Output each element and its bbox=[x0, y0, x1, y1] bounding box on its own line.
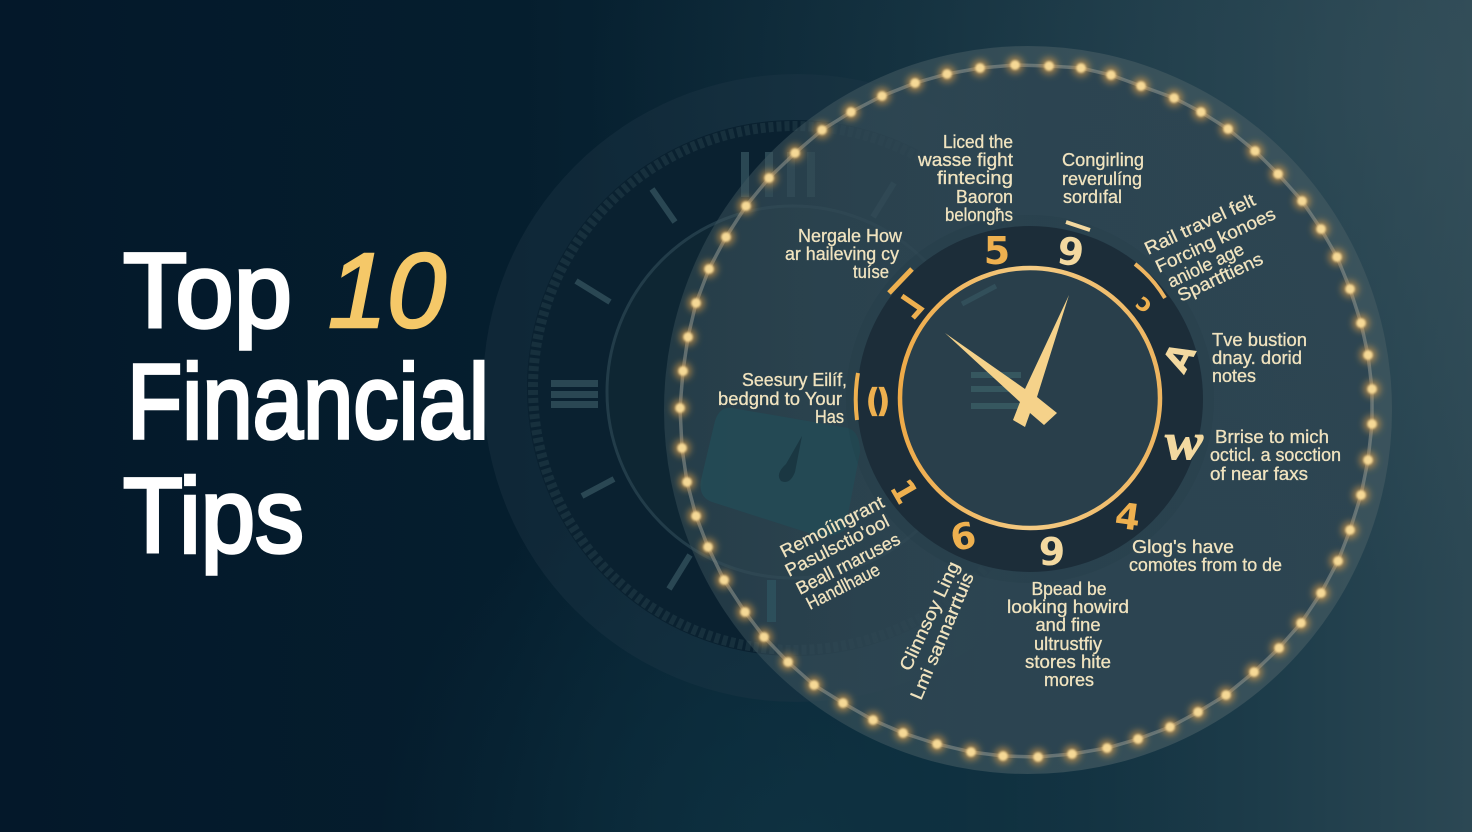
tip: upper right rotated: Forcing konoes bbox=[1152, 204, 1279, 277]
tip: right lower: octicl. a socction bbox=[1210, 445, 1341, 465]
tip: upper left bbox=[785, 226, 903, 282]
tip: bottom centre: looking howird bbox=[1007, 597, 1129, 617]
tip: upper right rotated: Spartftiens bbox=[1174, 249, 1266, 306]
tip: left: Seesury Eilíf, bbox=[742, 370, 847, 390]
dial face bbox=[900, 268, 1160, 528]
tip: top left: belongħs bbox=[945, 205, 1013, 225]
dial numerals: 9 bbox=[1039, 530, 1065, 574]
tip: bottom centre: ultrustfiy bbox=[1034, 634, 1102, 654]
tip: top left: Baoron bbox=[956, 187, 1013, 207]
tip: right upper bbox=[1212, 330, 1307, 386]
title: Financial bbox=[127, 343, 489, 461]
tip: left: Has bbox=[815, 407, 844, 427]
tip: lower left rotated bbox=[777, 492, 903, 614]
dial numerals: 1 bbox=[882, 472, 926, 511]
tip: top right: Congirling bbox=[1062, 150, 1144, 170]
tip: upper right rotated bbox=[1141, 190, 1279, 306]
tip: bottom steep rotated: Clinnsoy Ling bbox=[895, 558, 963, 674]
tip: lower right: Glog's have bbox=[1132, 537, 1234, 557]
dial numerals: 5 bbox=[984, 229, 1010, 273]
tip: upper left: ar haileving cy bbox=[785, 244, 899, 264]
tip: top right: sordıfal bbox=[1063, 187, 1122, 207]
clock hands bbox=[945, 295, 1069, 427]
dial numerals: 9 bbox=[1055, 228, 1087, 276]
tip: top left: Liced the bbox=[943, 132, 1013, 152]
tip: lower right: comotes from to de bbox=[1129, 555, 1282, 575]
tip: right upper: Tve bustion bbox=[1212, 330, 1307, 350]
tip: lower left rotated: Pasulsctio'ool bbox=[782, 511, 892, 581]
tip: right upper: dnay. dorid bbox=[1212, 348, 1302, 368]
tip: top right: reverulíng bbox=[1062, 169, 1142, 189]
title: Top bbox=[123, 232, 292, 350]
tip: right lower bbox=[1210, 427, 1341, 484]
tip: bottom centre: mores bbox=[1044, 670, 1094, 690]
tip: upper left: tuíse bbox=[853, 262, 889, 282]
tip: lower right bbox=[1129, 537, 1282, 575]
dial numerals: w bbox=[1165, 414, 1203, 471]
tip: top left bbox=[917, 132, 1013, 225]
ghost watch backdrop bbox=[483, 74, 1111, 702]
tip: bottom centre bbox=[1007, 579, 1129, 690]
dial numerals: () bbox=[867, 384, 889, 419]
tip: bottom centre: stores hite bbox=[1025, 652, 1111, 672]
tip: left: bedgnd to Your bbox=[718, 389, 842, 409]
bead ring bbox=[680, 65, 1372, 757]
tip: bottom steep rotated bbox=[895, 558, 978, 703]
tip: bottom centre: Bpead be bbox=[1032, 579, 1106, 599]
tip: left bbox=[718, 370, 847, 427]
tip: right lower: Brrise to mich bbox=[1215, 427, 1329, 447]
tip: lower left rotated: Beall rnaruses bbox=[793, 529, 903, 599]
tip: right upper: notes bbox=[1212, 366, 1256, 386]
tip: bottom centre: and fine bbox=[1036, 615, 1100, 635]
tip: upper left: Nergale How bbox=[798, 226, 903, 246]
dial numerals: 4 bbox=[1112, 495, 1143, 540]
tip: bottom steep rotated: Lmi sannarrtuis bbox=[906, 570, 978, 703]
tip: lower left rotated: Remoíingrant bbox=[777, 492, 887, 562]
title bbox=[123, 232, 489, 575]
title: 10 bbox=[328, 232, 446, 350]
dial numerals: A bbox=[1156, 336, 1205, 380]
inner plate echoing the ghost watch bbox=[700, 408, 860, 622]
dial dark ring bbox=[846, 215, 1214, 583]
main translucent disc bbox=[664, 46, 1392, 774]
tip: right lower: of near faxs bbox=[1210, 464, 1308, 484]
tip: upper right rotated: Rail travel felt bbox=[1141, 190, 1258, 259]
tip: upper right rotated: aniole age bbox=[1164, 239, 1247, 292]
dial numerals: 6 bbox=[947, 515, 980, 560]
tip: lower left rotated: Handlhaue bbox=[803, 559, 883, 614]
dial numerals: ɔ bbox=[1131, 289, 1159, 319]
dial numerals bbox=[867, 228, 1205, 574]
tip: top left: fintecing bbox=[937, 168, 1013, 188]
title: Tips bbox=[123, 457, 304, 575]
tip: top right bbox=[1062, 150, 1144, 207]
tip: top left: wasse fight bbox=[917, 150, 1013, 170]
dial tick arcs bbox=[856, 222, 1165, 420]
